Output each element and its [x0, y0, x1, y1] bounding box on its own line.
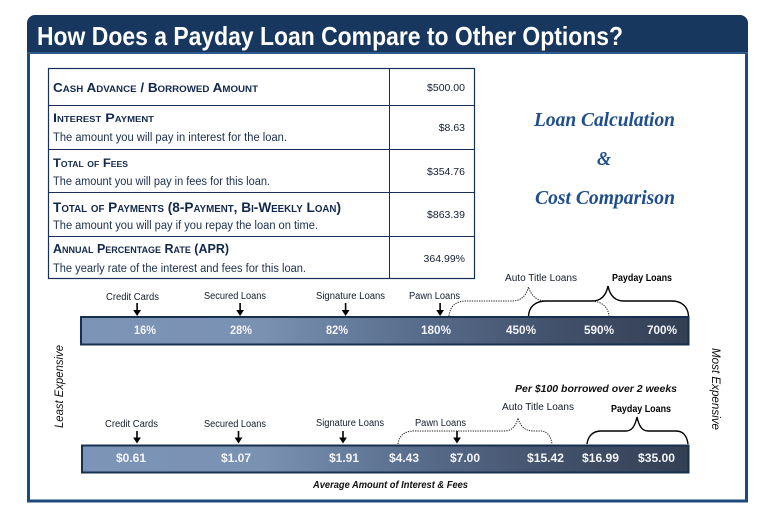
cost loan labels: Payday Loans: [611, 404, 671, 415]
loan calculation table: [48, 68, 474, 278]
row: total of payments: The amount you will pay if you repay the loan on time.: [53, 220, 318, 232]
APR loan labels: [106, 273, 672, 303]
cost loan labels: Pawn Loans: [415, 418, 466, 429]
APR loan labels: Signature Loans: [316, 291, 385, 302]
row: interest payment: [53, 111, 465, 144]
row: total of fees: $354.76: [427, 166, 465, 178]
row: cash advance: $500.00: [427, 82, 465, 94]
APR loan labels: Auto Title Loans: [505, 273, 577, 284]
cost bracket: auto title loans: [398, 418, 552, 444]
row: APR: 364.99%: [424, 253, 465, 265]
cost loan labels: Signature Loans: [316, 418, 384, 429]
APR arrows: [133, 303, 444, 316]
APR values: 28%: [230, 323, 252, 337]
cost values: $1.07: [221, 451, 251, 465]
APR bar: [81, 317, 688, 344]
row: total of payments: $863.39: [427, 209, 465, 221]
side heading: loan calculation and cost comparison: [533, 110, 675, 209]
title: How Does a Payday Loan Compare to Other Options?: [37, 21, 623, 51]
label: most expensive: Most Expensive: [709, 348, 721, 430]
APR loan labels: Credit Cards: [106, 292, 159, 303]
cost values: $35.00: [638, 451, 675, 465]
APR values: [134, 323, 677, 337]
row: APR: [53, 242, 465, 275]
cost bar: [82, 446, 688, 472]
cost values: $1.91: [329, 451, 359, 465]
APR bracket: payday loans: [528, 286, 688, 316]
header band: [27, 15, 748, 54]
cost values: $0.61: [116, 451, 146, 465]
row: APR: Annual Percentage Rate (APR): [53, 242, 229, 256]
note: per $100 borrowed: Per $100 borrowed over 2 weeks: [515, 383, 677, 395]
row: interest payment: The amount you will pay in interest for the loan.: [53, 132, 287, 144]
cost loan labels: [105, 402, 671, 430]
row: total of fees: The amount you will pay in fees for this loan.: [53, 176, 270, 188]
label: least expensive: Least Expensive: [54, 345, 66, 428]
cost values: $16.99: [582, 451, 619, 465]
row: total of payments: [53, 199, 465, 232]
cost loan labels: Credit Cards: [105, 419, 158, 430]
cost values: $4.43: [389, 451, 419, 465]
cost comparison scale: [82, 402, 688, 472]
cost loan labels: Secured Loans: [204, 419, 266, 430]
side heading: loan calculation and cost comparison: Loan Calculation: [533, 110, 675, 131]
cost bracket: payday loans: [587, 417, 688, 444]
row: interest payment: $8.63: [439, 122, 465, 134]
cost values: [116, 451, 675, 465]
APR values: 16%: [134, 323, 156, 337]
APR comparison scale: [81, 273, 688, 344]
row: cash advance: Cash Advance / Borrowed Amount: [53, 81, 259, 95]
APR values: 590%: [584, 323, 614, 337]
cost values: $15.42: [527, 451, 564, 465]
APR loan labels: Secured Loans: [204, 291, 266, 302]
caption: average amount of interest and fees: Average Amount of Interest & Fees: [312, 479, 468, 491]
row: cash advance: [53, 81, 465, 95]
side heading: loan calculation and cost comparison: Cost Comparison: [535, 188, 675, 209]
APR loan labels: Payday Loans: [612, 273, 672, 284]
APR values: 180%: [421, 323, 451, 337]
cost arrows: [133, 431, 461, 444]
cost values: $7.00: [450, 451, 480, 465]
row: APR: The yearly rate of the interest and fees for this loan.: [53, 263, 306, 275]
row: total of fees: [53, 156, 465, 188]
row: total of fees: Total of Fees: [53, 156, 129, 170]
side heading: loan calculation and cost comparison: &: [597, 149, 611, 170]
row: total of payments: Total of Payments (8-Payment, Bi-Weekly Loan): [53, 199, 341, 215]
APR values: 82%: [326, 323, 348, 337]
cost loan labels: Auto Title Loans: [502, 402, 574, 413]
APR values: 450%: [506, 323, 536, 337]
APR values: 700%: [647, 323, 677, 337]
APR loan labels: Pawn Loans: [409, 291, 460, 302]
APR bracket: auto title loans: [449, 287, 609, 316]
row: interest payment: Interest Payment: [53, 111, 154, 125]
